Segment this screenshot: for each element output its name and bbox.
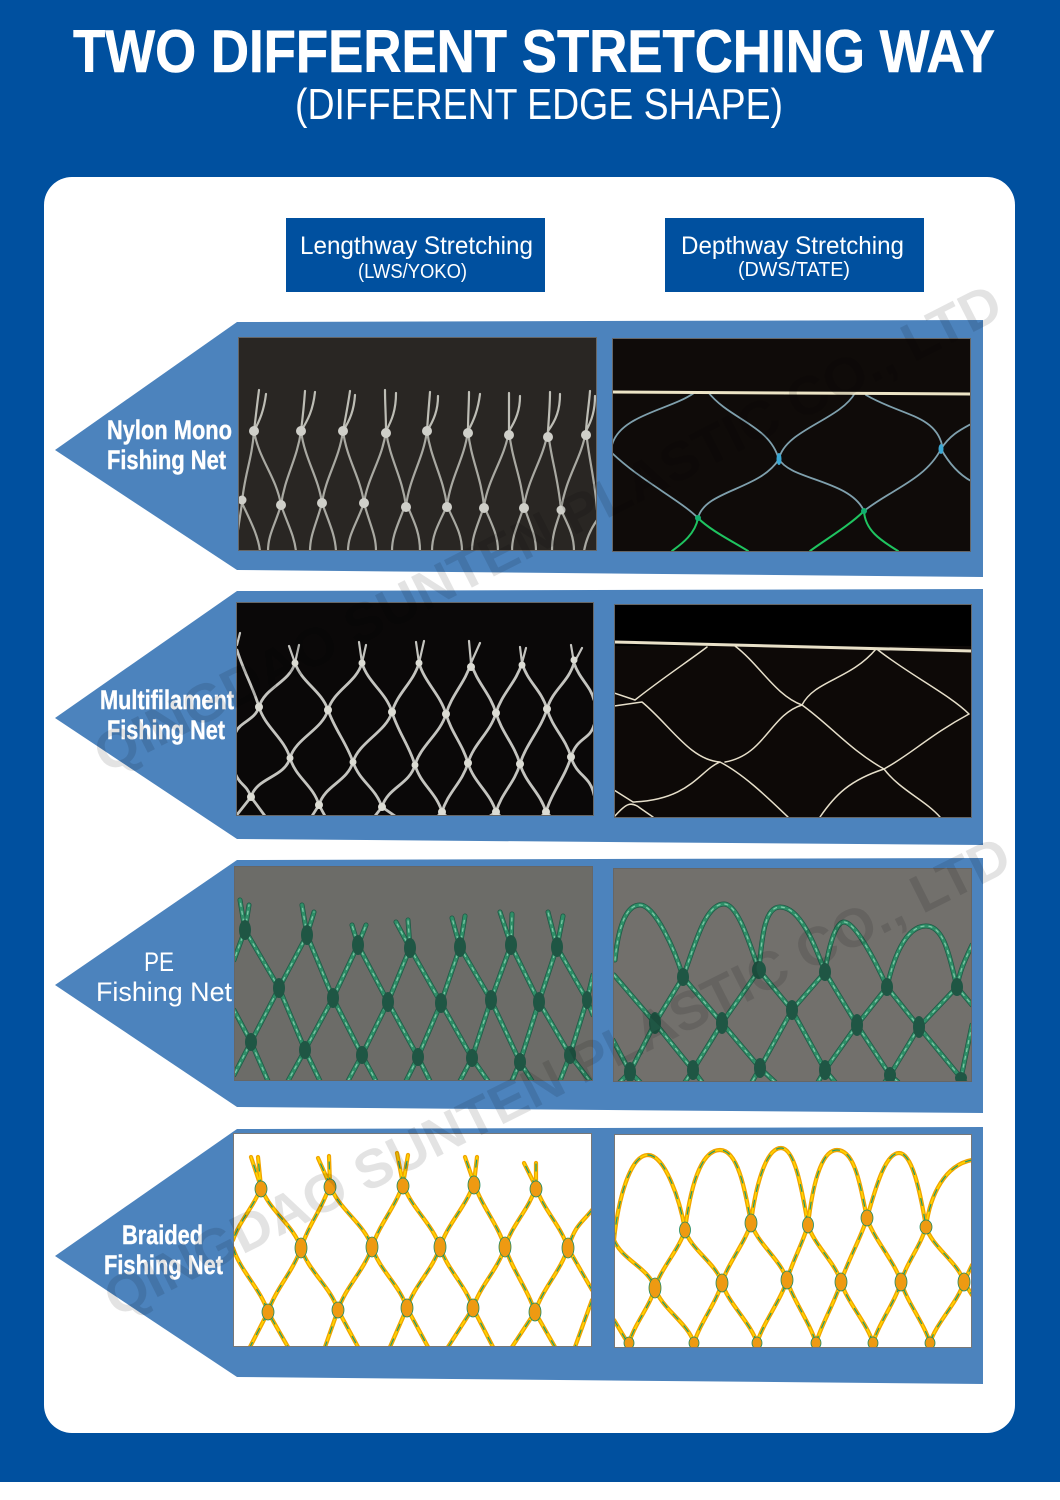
label: multifilament fishing net: Multifilament <box>100 685 234 715</box>
column header: lengthway stretching: (LWS/YOKO) <box>358 261 467 283</box>
label: braided fishing net: Fishing Net <box>104 1250 223 1280</box>
column header: lengthway stretching: Lengthway Stretching <box>300 232 533 260</box>
photo: PE depthway stretched net <box>613 868 972 1082</box>
panel: white card <box>44 177 1015 1433</box>
photo: multifilament lengthway stretched net <box>236 602 594 816</box>
photo: multifilament depthway stretched net <box>614 604 972 818</box>
column header: depthway stretching <box>665 218 924 292</box>
photo: braided depthway stretched net <box>614 1134 972 1348</box>
photo: PE lengthway stretched net <box>234 866 593 1081</box>
column header: depthway stretching: (DWS/TATE) <box>738 259 850 281</box>
label: PE fishing net: PE <box>144 947 174 977</box>
label: PE fishing net <box>96 947 232 1007</box>
panel: PE fishing net <box>55 858 983 1113</box>
panel: braided fishing net <box>55 1127 983 1384</box>
label: braided fishing net: Braided <box>122 1220 203 1250</box>
label: nylon mono fishing net: Fishing Net <box>107 445 226 475</box>
column header: depthway stretching: Depthway Stretching <box>681 232 904 260</box>
photo: braided lengthway stretched net <box>233 1133 592 1347</box>
panel: nylon mono fishing net <box>55 320 983 577</box>
label: PE fishing net: Fishing Net <box>96 977 232 1007</box>
label: braided fishing net <box>104 1220 223 1280</box>
photo: nylon lengthway stretched net <box>238 337 597 551</box>
label: nylon mono fishing net <box>107 415 232 475</box>
column header: lengthway stretching <box>286 218 545 292</box>
label: multifilament fishing net <box>100 685 234 745</box>
label: multifilament fishing net: Fishing Net <box>107 715 225 745</box>
subtitle: (DIFFERENT EDGE SHAPE) <box>295 80 783 129</box>
watermark: upper: QINGDAO SUNTEN PLASTIC CO., LTD <box>84 273 1011 785</box>
panel: multifilament fishing net <box>55 589 983 845</box>
watermark: lower: QINGDAO SUNTEN PLASTIC CO., LTD <box>95 825 1020 1329</box>
label: nylon mono fishing net: Nylon Mono <box>107 415 232 445</box>
photo: nylon depthway stretched net <box>612 338 971 552</box>
